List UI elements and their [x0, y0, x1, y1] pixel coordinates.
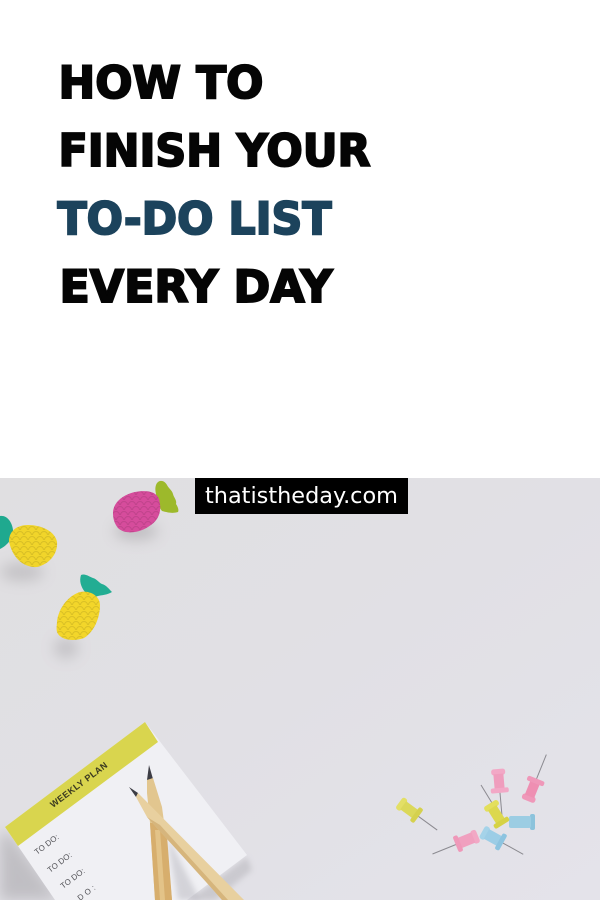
photo panel — [0, 478, 600, 900]
desk surface — [0, 478, 600, 900]
pencil shadow — [167, 838, 200, 900]
title line: how to: HOW TO — [58, 58, 264, 109]
title line: to-do list: TO-DO LIST — [58, 194, 332, 245]
website label — [195, 478, 408, 514]
notepad lines: TO DO: — [33, 833, 61, 857]
icon: yellow push pin — [394, 796, 442, 837]
title — [58, 58, 370, 313]
icon: blue push pin lower — [478, 824, 528, 862]
icon: blue push pin right — [509, 814, 535, 830]
label text: thatistheday.com — [205, 484, 398, 509]
notepad sheet — [5, 722, 247, 900]
icon: yellow push pin centre — [482, 799, 510, 829]
icon: upright pencil — [147, 765, 172, 900]
icon: pink push pin left — [429, 828, 481, 862]
icon: pink push pin top — [489, 768, 511, 817]
title line: every day: EVERY DAY — [60, 262, 333, 313]
icon: yellow pineapple eraser upright — [54, 574, 112, 658]
notepad lines: TO DO: — [59, 867, 87, 891]
icon: stray needle — [481, 785, 492, 803]
notepad lines: TO DO: — [46, 851, 74, 875]
notepad shadow — [0, 832, 60, 900]
notepad header band — [5, 722, 158, 846]
notepad header text: WEEKLY PLAN — [48, 760, 109, 810]
notepad lines — [33, 833, 97, 900]
title line: finish your: FINISH YOUR — [58, 126, 370, 177]
icon: yellow pineapple eraser with teal leaves — [0, 516, 57, 581]
icon: leaning pencil — [129, 787, 244, 900]
icon: pink push pin right — [519, 751, 555, 804]
notepad — [0, 722, 252, 900]
push pins — [394, 751, 555, 862]
icon: pink pineapple eraser — [113, 481, 178, 540]
label background — [195, 478, 408, 514]
